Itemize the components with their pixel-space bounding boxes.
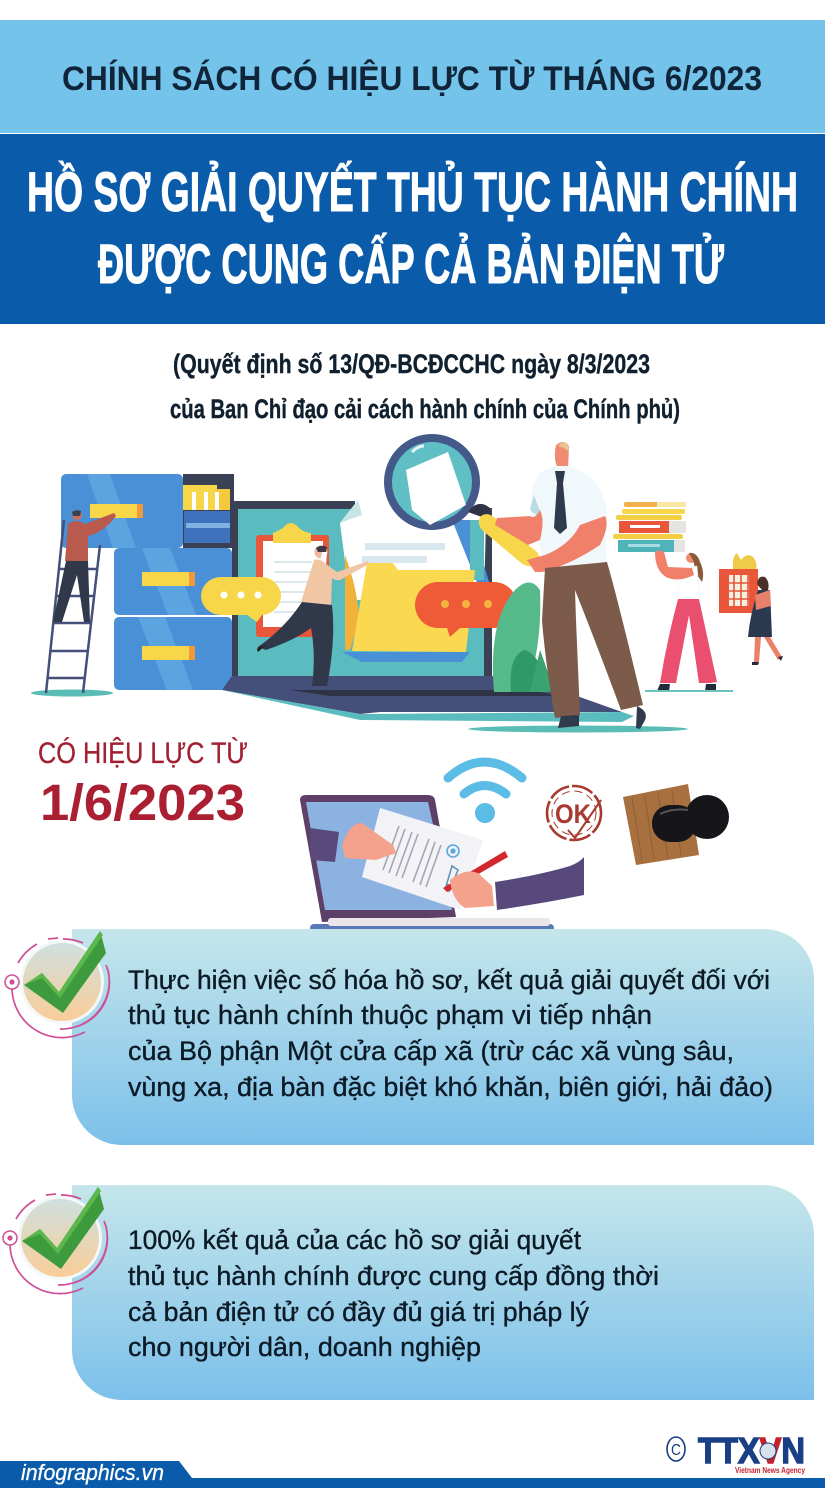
woman carrying books (613, 502, 733, 692)
TTXVN logo: TTXVN (698, 1430, 805, 1471)
clipboard (256, 523, 329, 637)
TTXVN logo (667, 1430, 805, 1475)
signing hand with pen (443, 851, 584, 910)
plants (493, 582, 555, 692)
effective date label: 1/6/2023 (40, 774, 245, 831)
icon: OK stamp mark (547, 786, 601, 840)
header band: policy label: CHÍNH SÁCH CÓ HIỆU LỰC TỪ THÁNG 6/2023 (62, 60, 762, 98)
woman carrying basket (719, 553, 783, 665)
legal reference text (170, 349, 680, 424)
panel: electronic results (72, 1185, 814, 1400)
panel: electronic results: thủ tục hành chính được cung cấp đồng thời (128, 1261, 659, 1291)
icon: wifi (448, 762, 522, 823)
panel: digitizing records (72, 929, 814, 1145)
laptop (222, 501, 634, 722)
man on ladder (46, 510, 116, 693)
title panel (0, 134, 825, 324)
yellow speech bubble (201, 577, 281, 622)
panel: digitizing records: thủ tục hành chính thuộc phạm vi tiếp nhận (128, 1000, 652, 1030)
illustration: office workers with files and laptop (31, 438, 783, 732)
legal reference text: (Quyết định số 13/QĐ-BCĐCCHC ngày 8/3/2023 (173, 349, 650, 379)
icon: green check 1 (5, 931, 109, 1038)
effective date label (38, 737, 248, 831)
TTXVN logo: Vietnam News Agency (735, 1466, 805, 1475)
icon: wooden stamp (623, 784, 729, 865)
red speech bubble (415, 582, 517, 637)
panel: electronic results: cả bản điện tử có đầy đủ giá trị pháp lý (128, 1297, 590, 1327)
running man (257, 546, 369, 686)
panel: electronic results: 100% kết quả của các hồ sơ giải quyết (128, 1225, 582, 1255)
laptop with document (300, 795, 554, 932)
icon: OK stamp mark: OK (555, 799, 591, 829)
illustration: digital document signing (300, 762, 729, 932)
effective date label: CÓ HIỆU LỰC TỪ (38, 737, 248, 770)
panel: digitizing records: của Bộ phận Một cửa cấp xã (trừ các xã vùng sâu, (128, 1036, 734, 1066)
large man holding magnifier (468, 442, 688, 732)
footer bar with site name: infographics.vn (21, 1460, 164, 1485)
magnifying glass (388, 438, 539, 566)
panel: electronic results: cho người dân, doanh nghiệp (128, 1332, 481, 1362)
filing cabinet (31, 474, 234, 696)
paper and yellow folder (340, 470, 490, 662)
panel: digitizing records: vùng xa, địa bàn đặc biệt khó khăn, biên giới, hải đảo) (128, 1072, 773, 1102)
TTXVN logo: C (671, 1442, 681, 1459)
icon: green check 2 (3, 1187, 107, 1294)
panel: digitizing records: Thực hiện việc số hóa hồ sơ, kết quả giải quyết đối với (128, 965, 770, 995)
header band: policy label (0, 20, 825, 133)
footer bar with site name (0, 1460, 825, 1488)
